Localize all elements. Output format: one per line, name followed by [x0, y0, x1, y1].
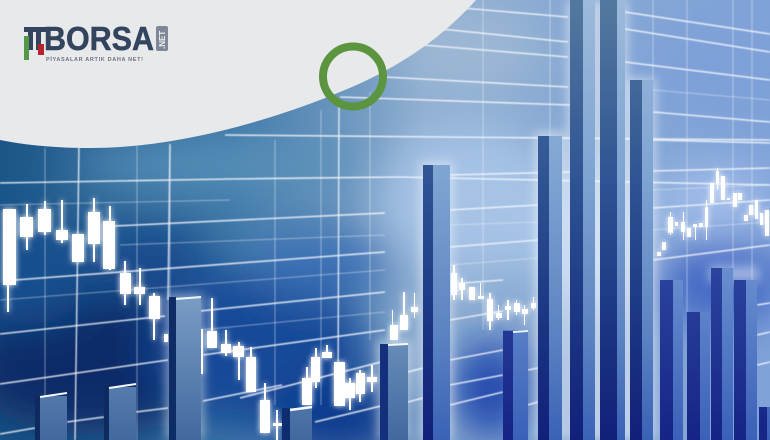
candlesticks: left group: [3, 198, 168, 342]
logo tagline: PİYASALAR ARTIK DAHA NET!: [46, 56, 143, 63]
bar 16: [759, 407, 770, 440]
bar 6: [423, 165, 450, 440]
candlesticks: middle group: [201, 292, 418, 440]
bar 7: [503, 330, 528, 440]
candlesticks: right group: [657, 168, 769, 256]
logo .NET tag: .NET: [158, 31, 167, 49]
logo wordmark: BORSA: [44, 20, 154, 57]
bar 15: [734, 280, 757, 440]
candlesticks: centre group: [451, 265, 536, 330]
bar 12: [660, 280, 683, 440]
bar 11: [630, 80, 653, 440]
logo .NET tag: [156, 26, 168, 51]
logo: [24, 20, 168, 63]
bar 4: [282, 407, 312, 440]
grey curved header panel: [0, 0, 476, 148]
bar 2: [104, 384, 136, 440]
bar 13: [687, 312, 710, 440]
bar glows: [166, 0, 759, 440]
bar 3: [169, 297, 201, 440]
bar 1: [35, 393, 67, 440]
bar 10: [600, 0, 625, 440]
bar 9: [570, 0, 595, 440]
logo icon: [24, 27, 46, 60]
bar 5: [380, 344, 408, 440]
green ring: [323, 46, 383, 106]
bar 14: [711, 268, 733, 440]
bar 8: [538, 136, 562, 440]
